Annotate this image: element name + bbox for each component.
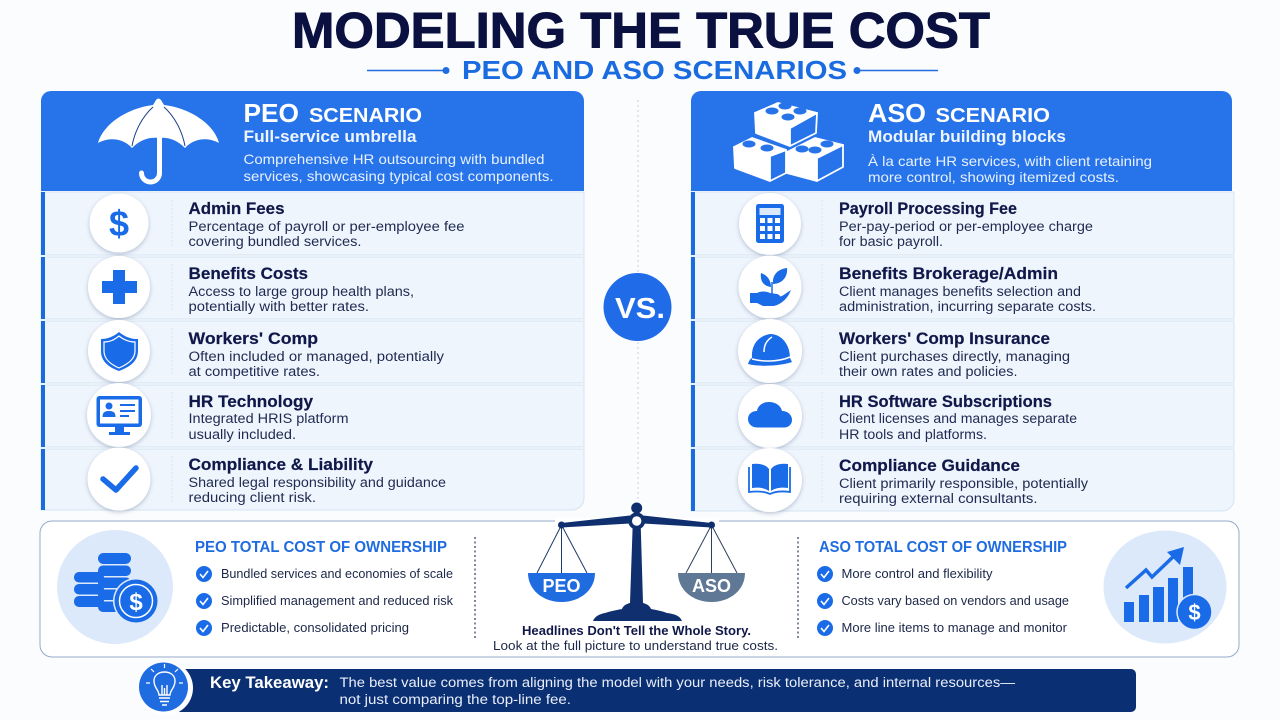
icon: medical cross [88, 256, 150, 318]
row: payroll processing fee [691, 192, 1234, 255]
key takeaway banner: not just comparing the top-line fee. [340, 692, 571, 707]
ASO header [691, 91, 1232, 191]
icon: balance scale: ASO [692, 576, 731, 596]
icon: check mark [88, 448, 150, 510]
row: workers comp: Often included or managed, potentially [188, 349, 444, 364]
row: admin fees [41, 192, 584, 255]
ASO cost of ownership list: Costs vary based on vendors and usage [842, 594, 1069, 608]
row: HR software subscriptions: Client licenses and manages separate [839, 411, 1077, 426]
row: workers comp insurance: Workers' Comp Insurance [839, 330, 1050, 348]
row: payroll processing fee: Payroll Processing Fee [839, 200, 1017, 218]
row: compliance guidance: Compliance Guidance [839, 457, 1020, 475]
ASO header: ASO [868, 98, 926, 128]
key takeaway banner: The best value comes from aligning the model with your needs, risk tolerance, and internal resources— [340, 675, 1016, 690]
icon: building blocks [734, 102, 843, 181]
row: HR software subscriptions [691, 384, 1234, 448]
row: workers comp insurance [691, 319, 1234, 383]
PEO cost of ownership list [195, 539, 454, 636]
PEO cost of ownership list: Predictable, consolidated pricing [221, 621, 409, 635]
row: HR technology: Integrated HRIS platform [188, 411, 348, 426]
ASO cost of ownership list: More line items to manage and monitor [842, 621, 1067, 635]
row: benefits costs: Access to large group health plans, [188, 284, 414, 299]
panel: total cost of ownership [40, 502, 1239, 657]
PEO header: SCENARIO [309, 105, 422, 127]
row: compliance and liability [41, 448, 584, 510]
ASO header: À la carte HR services, with client retaining [868, 153, 1152, 169]
icon: calculator [739, 193, 801, 255]
icon: monitor [87, 383, 151, 447]
row: workers comp insurance: Client purchases directly, managing [839, 349, 1070, 364]
row: benefits costs: potentially with better rates. [188, 299, 369, 314]
row: compliance and liability: reducing client risk. [188, 490, 316, 505]
PEO header: Full-service umbrella [244, 128, 417, 146]
subtitle: PEO AND ASO SCENARIOS [462, 55, 847, 85]
panel: ASO scenario [691, 91, 1234, 512]
icon: rising chart: $ [1188, 600, 1201, 625]
ASO header: Modular building blocks [868, 128, 1066, 146]
icon: coin stacks [57, 530, 173, 644]
row: benefits brokerage: Client manages benefits selection and [839, 284, 1081, 299]
icon: light bulb [139, 661, 193, 715]
icon: dollar [90, 194, 148, 252]
row: admin fees: Percentage of payroll or per-employee fee [188, 219, 464, 234]
row: compliance guidance [691, 448, 1234, 512]
ASO header: SCENARIO [936, 105, 1050, 127]
icon: rising chart [1104, 530, 1226, 644]
row: benefits brokerage: administration, incurring separate costs. [839, 299, 1096, 314]
panel: PEO scenario [41, 91, 584, 510]
ASO cost of ownership list: More control and flexibility [842, 567, 993, 581]
row: benefits brokerage [691, 256, 1234, 319]
PEO header: services, showcasing typical cost components. [244, 168, 554, 184]
row: benefits costs: Benefits Costs [188, 265, 308, 283]
icon: hand with plant [738, 256, 802, 318]
scale caption: Headlines Don't Tell the Whole Story. [522, 624, 751, 638]
key takeaway banner: Key Takeaway: [210, 674, 329, 692]
row: HR technology [41, 383, 584, 447]
scale caption [493, 624, 778, 653]
row: benefits costs [41, 256, 584, 319]
row: compliance guidance: requiring external consultants. [839, 491, 1038, 506]
row: HR technology: HR Technology [188, 393, 314, 411]
PEO cost of ownership list: PEO TOTAL COST OF OWNERSHIP [195, 539, 447, 556]
ASO cost of ownership list [817, 539, 1069, 636]
row: compliance guidance: Client primarily responsible, potentially [839, 476, 1088, 491]
row: HR software subscriptions: HR tools and platforms. [839, 427, 987, 442]
subtitle [367, 55, 938, 85]
PEO cost of ownership list: Bundled services and economies of scale [221, 567, 453, 581]
scale caption: Look at the full picture to understand true costs. [493, 639, 778, 653]
icon: hard hat [738, 319, 802, 383]
row: HR technology: usually included. [188, 427, 296, 442]
row: compliance and liability: Compliance & Liability [188, 456, 374, 474]
row: admin fees: covering bundled services. [188, 234, 362, 249]
title: MODELING THE TRUE COST [292, 2, 990, 58]
row: workers comp insurance: their own rates and policies. [839, 364, 1018, 379]
PEO header [41, 91, 584, 191]
VS badge: VS. [615, 293, 665, 325]
row: payroll processing fee: for basic payroll. [839, 234, 943, 249]
row: payroll processing fee: Per-pay-period or per-employee charge [839, 219, 1093, 234]
ASO header: more control, showing itemized costs. [868, 169, 1119, 185]
row: workers comp [41, 320, 584, 383]
icon: coin stacks: $ [129, 589, 143, 616]
row: workers comp: at competitive rates. [188, 364, 320, 379]
icon: shield [88, 320, 150, 382]
row: workers comp: Workers' Comp [188, 330, 318, 348]
VS badge [604, 273, 672, 341]
PEO cost of ownership list: Simplified management and reduced risk [221, 594, 454, 608]
icon: balance scale: PEO [542, 576, 581, 596]
row: admin fees: Admin Fees [188, 200, 284, 218]
PEO header: PEO [244, 98, 299, 128]
key takeaway banner [139, 661, 1136, 715]
PEO header: Comprehensive HR outsourcing with bundled [244, 151, 544, 167]
ASO cost of ownership list: ASO TOTAL COST OF OWNERSHIP [819, 539, 1067, 556]
row: benefits brokerage: Benefits Brokerage/Admin [839, 265, 1058, 283]
icon: cloud [738, 384, 802, 448]
row: HR software subscriptions: HR Software Subscriptions [839, 393, 1052, 411]
icon: umbrella [98, 98, 219, 182]
icon: balance scale [528, 502, 745, 621]
icon: open book [738, 448, 802, 512]
center dotted divider [637, 100, 639, 500]
icon: dollar: $ [109, 203, 129, 244]
row: compliance and liability: Shared legal responsibility and guidance [188, 475, 446, 490]
